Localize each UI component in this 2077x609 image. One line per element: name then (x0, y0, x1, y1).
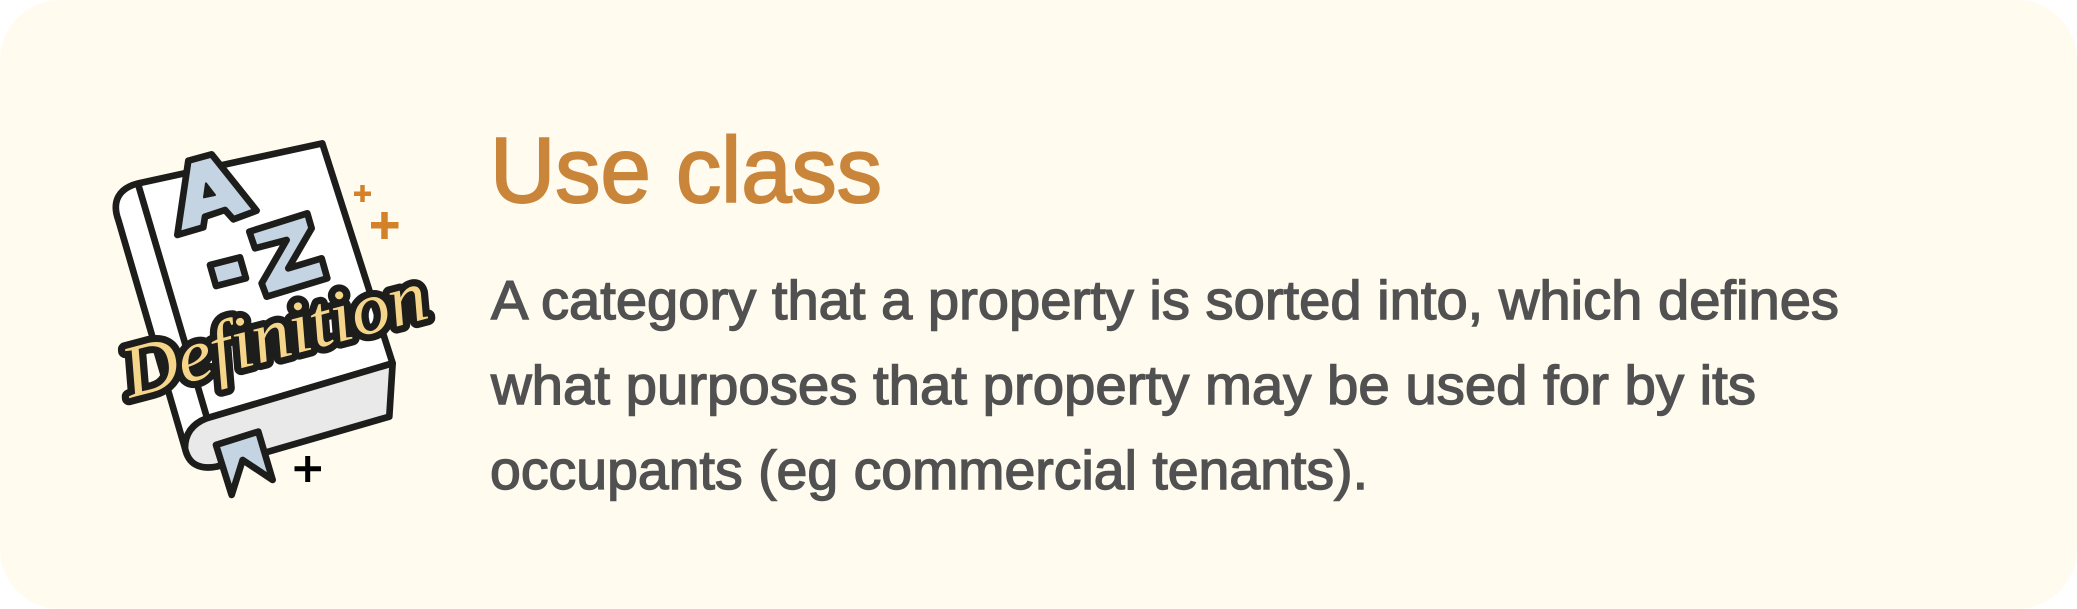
icon: large orange plus (371, 212, 398, 239)
definition text (490, 269, 1839, 501)
book pages (185, 363, 393, 468)
definition text: A category that a property is sorted into, which defines (491, 269, 1839, 331)
bookmark (216, 432, 273, 495)
definition text: what purposes that property may be used for by its (490, 354, 1756, 416)
letter A (177, 154, 257, 235)
hyphen (210, 257, 246, 286)
book cover (116, 143, 393, 448)
letter A counter (204, 183, 215, 197)
book spine line (138, 185, 207, 417)
definition script label: Definition (112, 254, 436, 415)
icon: black plus (294, 456, 321, 482)
icon: definition book (112, 143, 436, 495)
heading: Use class (490, 118, 882, 222)
letter Z (249, 213, 327, 297)
icon: small orange plus (354, 185, 371, 202)
definition script label: Definition (112, 254, 436, 415)
definition text: occupants (eg commercial tenants). (490, 439, 1368, 501)
